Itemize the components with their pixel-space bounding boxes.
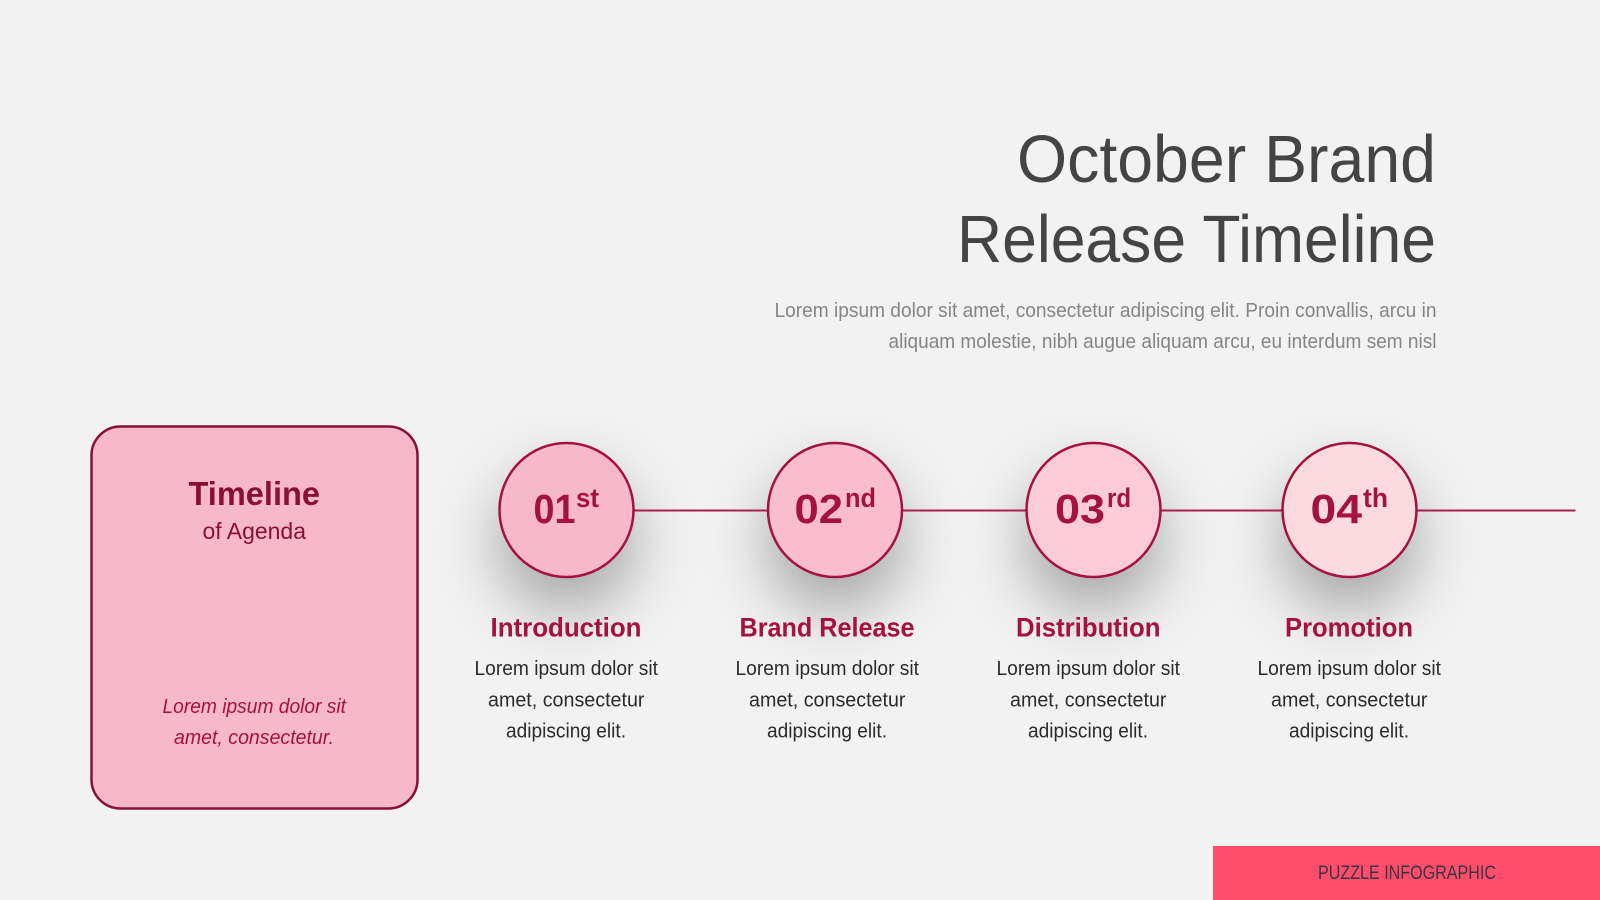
circle badge 02nd: 02 xyxy=(794,486,843,532)
step text: adipiscing elit. xyxy=(1289,720,1409,742)
footer banner xyxy=(1213,846,1600,900)
step heading: Promotion xyxy=(1285,612,1413,642)
step text: amet, consectetur xyxy=(1010,688,1167,712)
circle badge 03rd: rd xyxy=(1107,483,1131,513)
circle badge 04th: 04 xyxy=(1310,486,1362,532)
step 3: distribution xyxy=(996,443,1180,742)
step text xyxy=(1258,657,1441,742)
step 1: introduction xyxy=(474,443,658,742)
panel: timeline of agenda card xyxy=(92,426,418,808)
step text: Lorem ipsum dolor sit xyxy=(736,657,919,680)
card subheading: of Agenda xyxy=(202,518,306,544)
title: Release Timeline xyxy=(957,202,1436,277)
step heading: Distribution xyxy=(1016,612,1160,642)
step text: adipiscing elit. xyxy=(1028,720,1148,742)
title xyxy=(957,122,1436,277)
step text: amet, consectetur xyxy=(1271,688,1428,712)
step text: amet, consectetur xyxy=(749,688,906,712)
step text xyxy=(474,657,658,742)
card heading: Timeline xyxy=(188,475,320,512)
circle badge 01st xyxy=(500,443,634,577)
step heading: Brand Release xyxy=(740,612,914,642)
card italic note: Lorem ipsum dolor sit xyxy=(162,695,347,718)
step text: Lorem ipsum dolor sit xyxy=(996,657,1180,680)
step text xyxy=(996,657,1180,742)
circle badge 04th: th xyxy=(1363,483,1388,513)
step 2: brand release xyxy=(736,443,919,742)
card italic note xyxy=(162,695,347,749)
subtitle text block xyxy=(774,299,1436,353)
circle badge 02nd: nd xyxy=(845,483,876,513)
circle badge 01st: 01 xyxy=(534,486,576,532)
circle badge 04th xyxy=(1282,443,1416,577)
timeline connector line xyxy=(566,510,1576,512)
step heading: Introduction xyxy=(490,612,642,642)
circle shadows xyxy=(496,472,1420,612)
step text: adipiscing elit. xyxy=(506,720,626,742)
step text xyxy=(736,657,919,742)
step text: Lorem ipsum dolor sit xyxy=(1258,657,1441,680)
step 4: promotion xyxy=(1258,443,1441,742)
circle badge 03rd xyxy=(1026,443,1160,577)
subtitle text block: aliquam molestie, nibh augue aliquam arcu, eu interdum sem nisl xyxy=(888,330,1436,353)
circle badge 01st: st xyxy=(576,483,599,513)
footer banner: PUZZLE INFOGRAPHIC xyxy=(1318,863,1496,884)
circle badge 03rd: 03 xyxy=(1055,486,1105,532)
card italic note: amet, consectetur. xyxy=(174,726,334,749)
step text: adipiscing elit. xyxy=(767,720,887,742)
circle badge 02nd xyxy=(768,443,902,577)
step text: amet, consectetur xyxy=(488,688,645,712)
step text: Lorem ipsum dolor sit xyxy=(474,657,658,680)
subtitle text block: Lorem ipsum dolor sit amet, consectetur adipiscing elit. Proin convallis, arcu in xyxy=(774,299,1436,322)
title: October Brand xyxy=(1017,122,1436,197)
